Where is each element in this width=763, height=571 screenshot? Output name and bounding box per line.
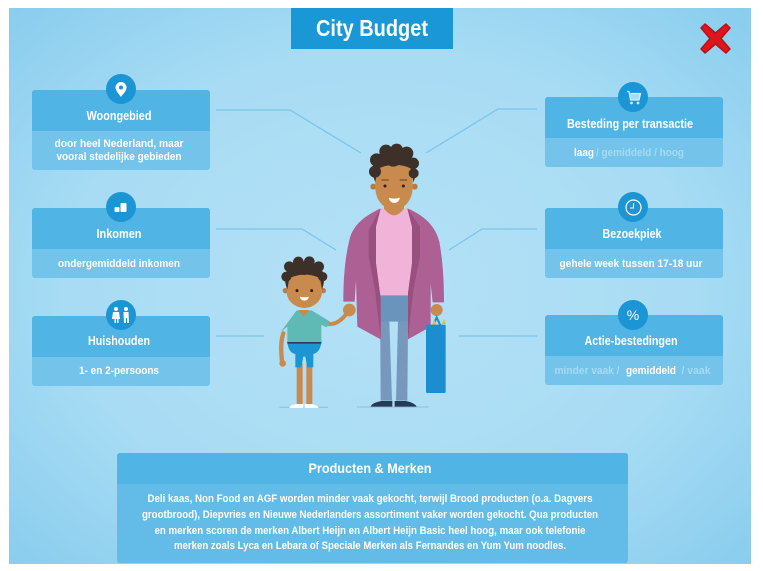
shorts [287, 342, 321, 367]
panel: Woongebied [32, 74, 210, 170]
face [295, 289, 298, 292]
panel: Huishouden [32, 300, 210, 386]
panel: Huishouden: Huishouden [88, 333, 150, 348]
hands [343, 304, 356, 316]
face [383, 184, 386, 187]
icon: percent: % [627, 307, 639, 323]
panel: Bezoekpiek: Bezoekpiek [602, 226, 662, 241]
text block: description: en merken scoren de merken Albert Heijn en Albert Heijn Basic heel hoog, maar ook telefonie [154, 525, 586, 537]
panel: Besteding per transactie: Besteding per transactie [567, 116, 693, 131]
panel: Producten & Merken: Producten & Merken [308, 460, 432, 476]
text block: description: Deli kaas, Non Food en AGF worden minder vaak gekocht, terwijl Brood producten (o.a. Dagvers [148, 493, 592, 505]
panel: Woongebied: Woongebied [86, 108, 152, 123]
adult figure [343, 144, 446, 407]
shoes [289, 404, 303, 408]
panel: Besteding per transactie: / gemiddeld / hoog [596, 147, 684, 159]
ground shadows [279, 406, 429, 408]
arms [281, 333, 283, 362]
head [370, 184, 376, 190]
panel: Woongebied: door heel Nederland, maar [54, 138, 184, 150]
panel: Bezoekpiek: gehele week tussen 17-18 uur [560, 258, 703, 270]
panel: Actie-bestedingen: Actie-bestedingen [584, 333, 678, 348]
shirt [281, 310, 330, 342]
text block: description [142, 493, 598, 552]
panel: Bezoekpiek [545, 192, 723, 278]
text block: description: grootbrood), Diepvries en Nieuwe Nederlanders assortiment vaker worden gekocht. Qua producten [142, 509, 598, 521]
panel: Producten & Merken [117, 453, 628, 563]
panel: Inkomen [32, 192, 210, 278]
panel: Inkomen: ondergemiddeld inkomen [58, 258, 180, 270]
icon: shopping cart [618, 82, 648, 112]
panel: Besteding per transactie: laag [574, 147, 594, 159]
panel: Huishouden: 1- en 2-persoons [79, 365, 159, 377]
hair [281, 256, 327, 289]
title [291, 8, 453, 49]
title: City Budget [316, 15, 428, 41]
legs [297, 363, 303, 404]
icon: location pin [106, 74, 136, 104]
trousers [380, 293, 408, 401]
icon: percent [618, 300, 648, 330]
head [283, 288, 288, 293]
connector lines [216, 109, 537, 336]
neck [384, 204, 404, 215]
panel: Actie-bestedingen: minder vaak / [554, 365, 620, 377]
panel: Besteding per transactie [545, 82, 723, 167]
shoes [371, 401, 392, 407]
panel: Actie-bestedingen: / vaak [682, 365, 711, 377]
shopping bag [432, 317, 442, 328]
icon: red close cross [701, 24, 730, 53]
panel: Inkomen: Inkomen [96, 226, 142, 241]
illustration: mother and child [279, 144, 446, 408]
panel: Woongebied: vooral stedelijke gebieden [56, 151, 182, 163]
icon: income bars [106, 192, 136, 222]
icon: family [106, 300, 136, 330]
shirt [376, 209, 412, 295]
text block: description: merken zoals Lyca en Lebara of Speciale Merken als Fernandes en Yum Yum noodles. [174, 540, 566, 552]
panel: Actie-bestedingen [545, 300, 723, 385]
child figure [279, 256, 347, 408]
panel: Actie-bestedingen: gemiddeld [626, 365, 676, 377]
hair [369, 144, 419, 183]
cardigan [343, 208, 381, 339]
icon: clock [618, 192, 648, 222]
